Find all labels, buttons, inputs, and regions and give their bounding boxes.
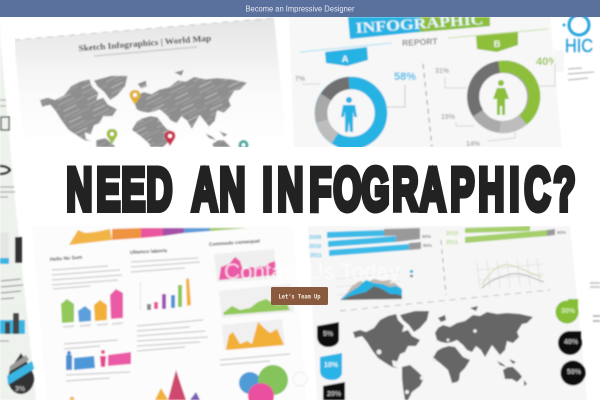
icon: green pin [107,129,117,144]
column 3 heading: Commodo consequat [209,238,260,248]
button: let's team up: Let's Team Up [278,294,321,300]
bar chart [140,278,191,310]
horizontal bars green [465,226,555,243]
sketched house bars [61,289,123,323]
badge: 50%: 50% [567,369,582,376]
bar percentages: 90% [422,234,431,239]
badge: A [325,47,368,66]
badge: 30% green [556,299,578,324]
label: 15%: 15% [441,114,456,121]
year labels: 2009 [309,235,321,241]
panel: report charts and dark world map [308,226,587,400]
lower collage [32,226,600,400]
legend icon [410,270,413,277]
panel: right edge card [590,282,600,322]
column 2 heading: Ullamco laboris [130,248,168,256]
icon: yellow pin [130,90,140,105]
icon: red pin [165,131,175,146]
year labels: 2010 [309,244,321,250]
badge: 5%: 5% [323,331,334,338]
label: 7%: 7% [295,76,306,83]
banner: infographic [347,17,491,40]
badge: 20%: 20% [327,391,342,398]
panel: infographic report [289,12,564,148]
label: report: REPORT [402,36,439,48]
badge: 30% green: 30% [561,308,576,315]
button: let's team up [271,287,328,305]
panel: report charts and dark world map: 2011 [446,240,458,246]
line chart [477,258,544,290]
badge: 10% [320,353,342,380]
horizontal bars blue [327,228,421,256]
orange area chart [222,319,285,350]
headline: NEED AN INFOGRAPHIC? [66,157,575,223]
donut chart B [473,67,534,127]
icon: droplet: 3% [15,386,26,393]
badge: A: A [342,54,349,65]
pink sketch chart [214,249,277,282]
icon: droplet [7,353,34,394]
top ribbon chart [69,228,248,245]
badge: 40%: 40% [564,339,579,346]
badge: 5% [317,322,339,347]
badge: 10%: 10% [324,362,339,369]
panel: sketch world map [15,17,279,147]
icon: ring [293,372,307,386]
icon: female figure [493,80,509,115]
badge: 20% [323,382,345,400]
sketch map [40,70,247,147]
map markers [376,329,477,394]
column 1 text [50,255,122,289]
badge: B [476,32,518,52]
panel: report charts and dark world map: 90% [557,230,566,235]
people icon bars [66,350,131,370]
column 1 text: Hello No Sum [50,255,83,263]
panel: report charts and dark world map: 2010 [446,231,458,237]
panel: colourful sketch infographic [32,226,307,400]
bar percentages [422,234,432,248]
icon: teal pin [238,140,248,150]
ghost text: contact us today: Contact Us Today [224,259,400,284]
area chart [336,272,402,300]
header text: Become an Impressive Designer [246,4,355,14]
banner: infographic: INFOGRAPHIC [355,12,484,37]
panel: right logo card [562,15,594,80]
badge: 40% [558,331,582,355]
title: sketch infographics: Sketch Infographics | World Map [78,33,212,53]
label: 31%: 31% [435,68,450,75]
donut chart A [321,83,381,143]
label: 58%: 58% [394,71,416,83]
label: 40%: 40% [536,56,558,68]
upper collage [15,17,594,147]
label: 14%: 14% [466,141,481,148]
mountain chart [155,370,200,400]
panel: far left strip [0,17,36,400]
icon: male figure [341,97,357,132]
dark world map [353,306,533,400]
badge: 50% [560,360,586,386]
label: HIC: HIC [565,36,593,56]
green area chart [219,284,294,318]
year labels [309,235,322,259]
year labels: 2011 [310,253,322,259]
venn circles [239,365,288,400]
badge: B: B [494,39,501,50]
bar percentages: 80% [423,243,432,248]
header bar [0,0,600,17]
